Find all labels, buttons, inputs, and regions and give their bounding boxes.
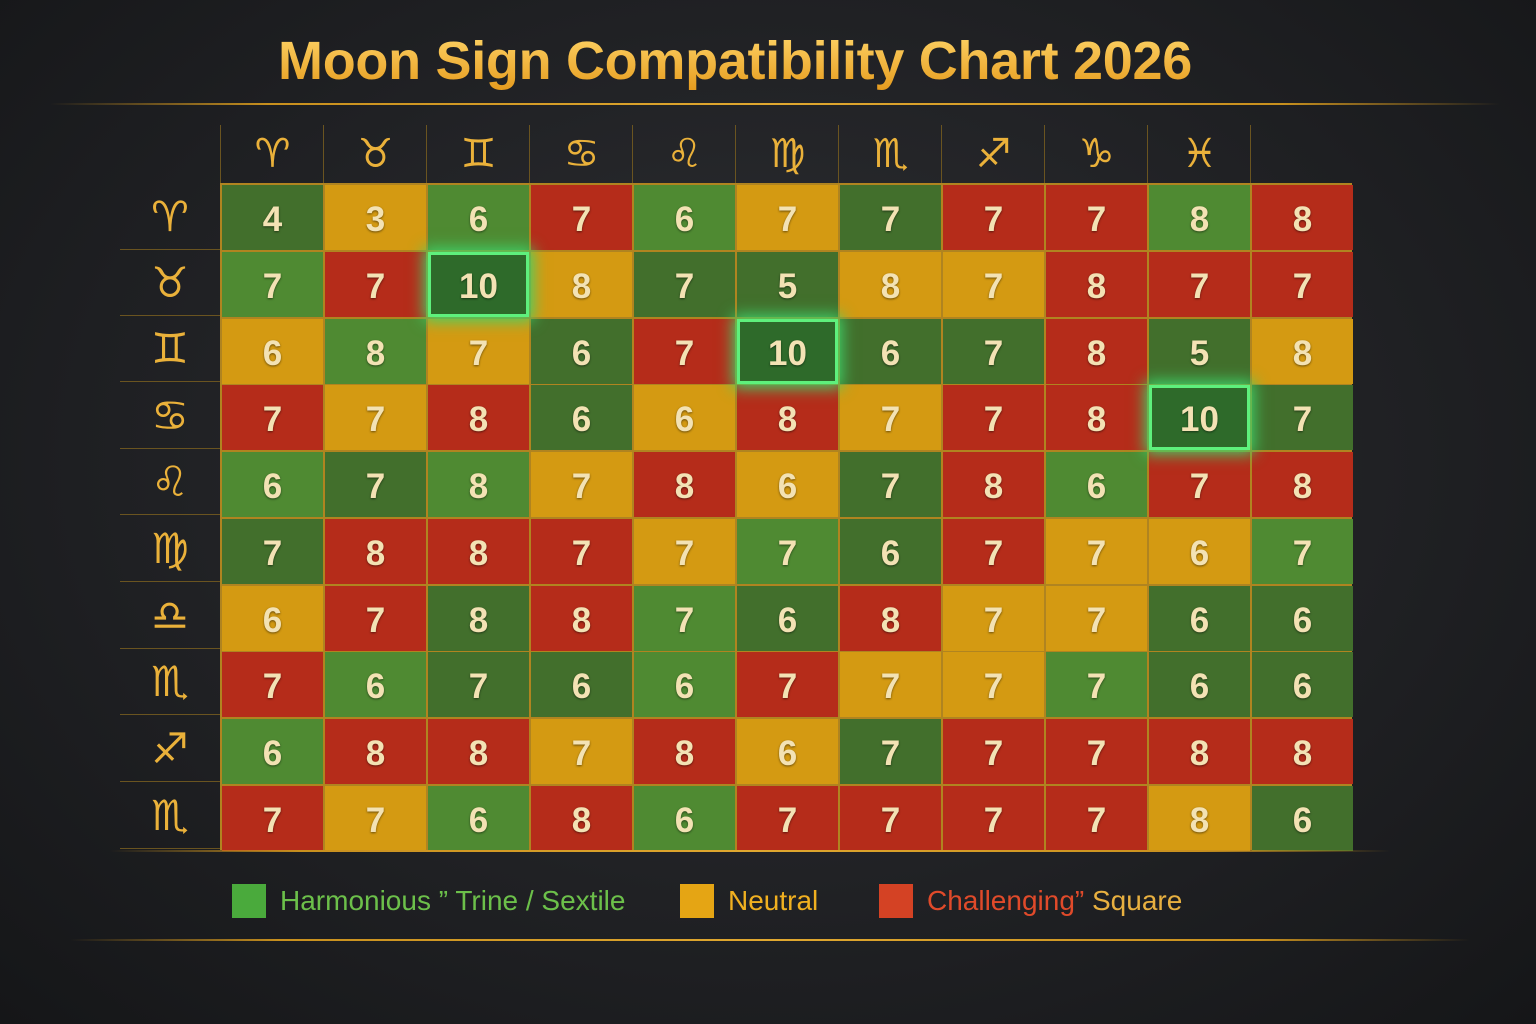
compatibility grid: 6 — [572, 667, 591, 706]
column headers: ♋︎ — [564, 131, 599, 177]
compatibility grid: 8 — [572, 601, 591, 640]
compatibility grid: 7 — [984, 801, 1003, 840]
compatibility grid: 7 — [778, 534, 797, 573]
column headers: ♌︎ — [667, 131, 702, 177]
compatibility grid: 8 — [984, 467, 1003, 506]
title — [0, 30, 1470, 92]
compatibility grid: 8 — [469, 534, 488, 573]
compatibility grid: 7 — [1293, 267, 1312, 306]
compatibility grid: 3 — [366, 200, 385, 239]
row headers: ♈︎ — [151, 192, 189, 240]
compatibility grid: 8 — [1190, 801, 1209, 840]
compatibility grid: 7 — [1190, 267, 1209, 306]
compatibility grid: 8 — [881, 267, 900, 306]
row headers: ♎︎ — [151, 590, 189, 640]
compatibility grid: 6 — [263, 334, 282, 373]
compatibility grid: 6 — [366, 667, 385, 706]
compatibility grid: 7 — [881, 200, 900, 239]
compatibility grid: 6 — [675, 667, 694, 706]
compatibility grid: 8 — [366, 734, 385, 773]
column headers: ♍︎ — [770, 131, 805, 177]
compatibility grid: 6 — [1190, 667, 1209, 706]
compatibility grid: 8 — [469, 400, 488, 439]
compatibility grid: 7 — [1087, 534, 1106, 573]
compatibility grid: 7 — [263, 667, 282, 706]
compatibility grid: 8 — [469, 467, 488, 506]
compatibility grid: 6 — [881, 534, 900, 573]
compatibility grid: 7 — [572, 734, 591, 773]
compatibility grid: 7 — [675, 601, 694, 640]
compatibility grid: 6 — [675, 400, 694, 439]
compatibility grid: 7 — [1190, 467, 1209, 506]
row headers: ♏︎ — [151, 790, 189, 840]
compatibility grid: 6 — [1087, 467, 1106, 506]
compatibility grid: 8 — [1190, 200, 1209, 239]
compatibility grid: 6 — [675, 801, 694, 840]
compatibility grid: 8 — [1293, 734, 1312, 773]
compatibility grid: 7 — [675, 334, 694, 373]
compatibility grid: 6 — [572, 334, 591, 373]
column headers: ♓︎ — [1182, 131, 1217, 177]
row headers: ♋︎ — [151, 390, 189, 440]
legend: neutral: Neutral — [728, 885, 818, 916]
compatibility grid: 7 — [469, 667, 488, 706]
compatibility grid: 8 — [1087, 267, 1106, 306]
compatibility grid: 8 — [469, 601, 488, 640]
row headers — [120, 192, 220, 849]
compatibility grid: 7 — [1087, 200, 1106, 239]
compatibility grid: 8 — [881, 601, 900, 640]
compatibility grid: 7 — [366, 467, 385, 506]
legend: challenging — [879, 884, 1182, 918]
compatibility grid: 8 — [1087, 400, 1106, 439]
compatibility grid: 8 — [1293, 467, 1312, 506]
compatibility grid: 7 — [984, 400, 1003, 439]
compatibility grid: 7 — [881, 667, 900, 706]
compatibility grid: 7 — [984, 200, 1003, 239]
compatibility grid: 7 — [984, 534, 1003, 573]
compatibility grid: 8 — [366, 534, 385, 573]
compatibility grid: 7 — [1087, 667, 1106, 706]
compatibility grid: 8 — [1087, 334, 1106, 373]
compatibility grid: 8 — [366, 334, 385, 373]
compatibility grid: 8 — [1293, 200, 1312, 239]
compatibility grid: 6 — [778, 601, 797, 640]
compatibility grid: 7 — [366, 601, 385, 640]
compatibility grid: 8 — [675, 467, 694, 506]
compatibility grid: 10 — [459, 267, 498, 306]
compatibility grid: 6 — [881, 334, 900, 373]
compatibility grid: 6 — [1293, 601, 1312, 640]
compatibility grid: 7 — [572, 200, 591, 239]
compatibility grid: 7 — [675, 267, 694, 306]
column headers: ♈︎ — [255, 131, 290, 177]
column headers: ♏︎ — [873, 131, 908, 177]
compatibility grid: 8 — [572, 267, 591, 306]
column headers: ♑︎ — [1079, 131, 1114, 177]
column headers — [220, 125, 1251, 183]
compatibility grid: 7 — [778, 801, 797, 840]
compatibility grid: 7 — [263, 400, 282, 439]
title: Moon Sign Compatibility Chart 2026 — [278, 31, 1192, 91]
compatibility grid: 7 — [572, 534, 591, 573]
compatibility grid: 7 — [881, 467, 900, 506]
legend: challenging: Square — [1092, 885, 1182, 916]
compatibility grid: 6 — [1190, 534, 1209, 573]
compatibility grid: 6 — [778, 467, 797, 506]
compatibility grid: 7 — [984, 667, 1003, 706]
legend: challenging: Challenging” — [927, 885, 1084, 916]
row headers: ♏︎ — [151, 656, 189, 706]
compatibility grid: 8 — [572, 801, 591, 840]
compatibility grid: 6 — [778, 734, 797, 773]
compatibility grid: 6 — [1293, 801, 1312, 840]
row headers: ♊︎ — [151, 324, 189, 372]
compatibility grid: 8 — [675, 734, 694, 773]
compatibility grid: 7 — [881, 400, 900, 439]
compatibility grid: 6 — [1190, 601, 1209, 640]
compatibility grid — [220, 183, 1352, 850]
compatibility grid: 7 — [572, 467, 591, 506]
compatibility grid: 8 — [778, 400, 797, 439]
compatibility grid: 7 — [984, 734, 1003, 773]
compatibility grid: 7 — [366, 801, 385, 840]
compatibility grid: 6 — [263, 601, 282, 640]
column headers: ♐︎ — [976, 131, 1011, 177]
compatibility grid: 7 — [366, 400, 385, 439]
legend: neutral — [680, 884, 818, 918]
compatibility grid: 7 — [984, 601, 1003, 640]
compatibility grid: 6 — [572, 400, 591, 439]
compatibility grid: 8 — [1293, 334, 1312, 373]
compatibility grid: 7 — [778, 667, 797, 706]
compatibility grid: 7 — [469, 334, 488, 373]
compatibility grid: 7 — [263, 801, 282, 840]
compatibility grid: 7 — [1087, 801, 1106, 840]
compatibility grid: 6 — [675, 200, 694, 239]
compatibility grid: 7 — [263, 267, 282, 306]
compatibility grid: 7 — [984, 334, 1003, 373]
compatibility grid: 6 — [263, 734, 282, 773]
column headers: ♊︎ — [461, 131, 496, 177]
column headers: ♉︎ — [358, 131, 393, 177]
row headers: ♌︎ — [151, 456, 189, 506]
compatibility grid: 4 — [263, 200, 282, 239]
compatibility grid: 6 — [1293, 667, 1312, 706]
compatibility grid: 5 — [1190, 334, 1209, 373]
compatibility grid: 6 — [469, 200, 488, 239]
compatibility grid: 7 — [1087, 601, 1106, 640]
compatibility grid: 5 — [778, 267, 797, 306]
compatibility grid: 6 — [263, 467, 282, 506]
compatibility grid: 7 — [675, 534, 694, 573]
compatibility grid: 6 — [469, 801, 488, 840]
row headers: ♐︎ — [151, 724, 189, 772]
compatibility grid: 7 — [366, 267, 385, 306]
compatibility grid: 7 — [1293, 534, 1312, 573]
compatibility grid: 7 — [881, 801, 900, 840]
compatibility grid: 7 — [881, 734, 900, 773]
row headers: ♍︎ — [151, 524, 189, 572]
legend: harmonious: Harmonious ” Trine / Sextile — [280, 885, 625, 916]
compatibility grid: 8 — [1190, 734, 1209, 773]
compatibility grid: 10 — [768, 334, 807, 373]
compatibility grid: 7 — [778, 200, 797, 239]
compatibility grid: 10 — [1180, 400, 1219, 439]
compatibility grid: 7 — [1293, 400, 1312, 439]
compatibility grid: 7 — [263, 534, 282, 573]
compatibility grid: 7 — [1087, 734, 1106, 773]
compatibility grid: 7 — [984, 267, 1003, 306]
compatibility grid: 8 — [469, 734, 488, 773]
row headers: ♉︎ — [151, 258, 189, 306]
